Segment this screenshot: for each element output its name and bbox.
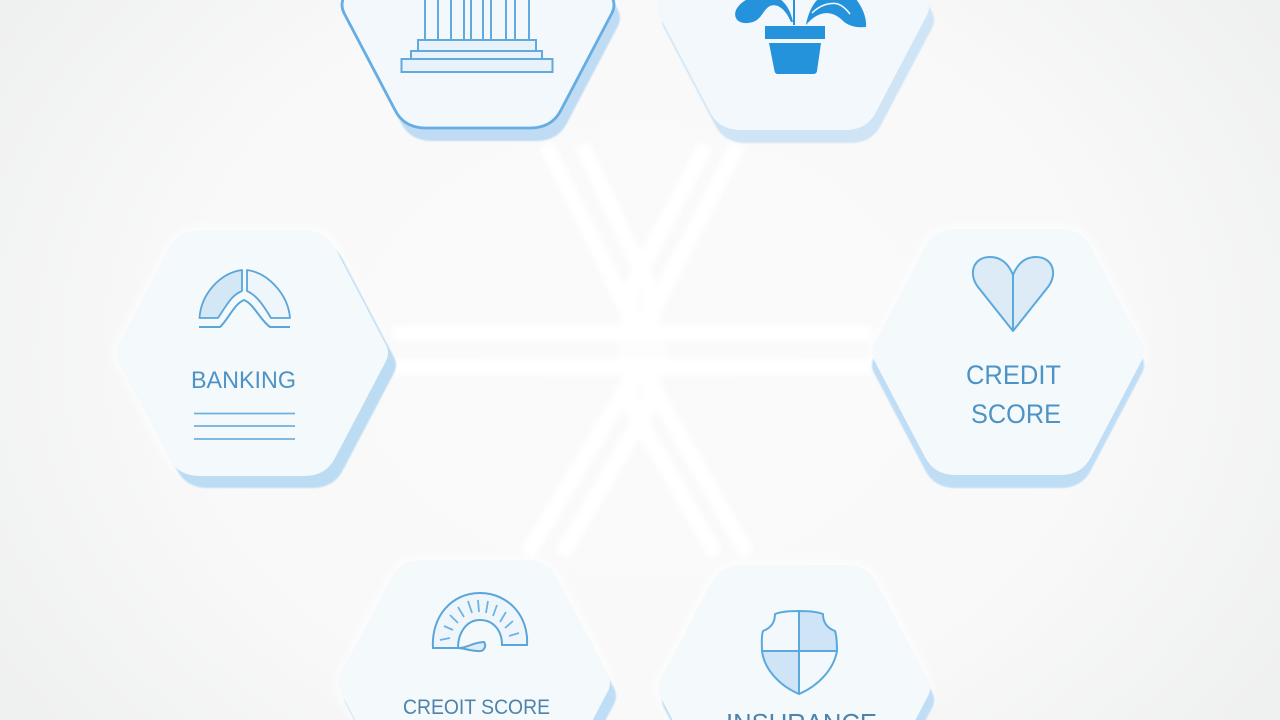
icon: potted plant <box>735 0 866 74</box>
label: credit score <box>966 360 1061 429</box>
panel: top-left hexagon (bank building) <box>342 0 620 141</box>
icon: bank columns <box>402 0 552 72</box>
label: credit score: SCORE <box>971 399 1061 429</box>
text lines <box>194 414 295 439</box>
panel: banking hexagon <box>116 230 396 488</box>
label: creoit score: CREOIT SCORE <box>403 696 550 719</box>
panel: credit score gauge hexagon <box>338 560 616 720</box>
icon: shield <box>762 611 837 694</box>
panel: credit score heart hexagon <box>872 229 1144 488</box>
label: banking: BANKING <box>191 367 296 394</box>
icon: heart <box>973 257 1053 331</box>
icon: gauge <box>433 593 527 651</box>
panel: top-right hexagon (plant) <box>657 0 934 143</box>
connector lines <box>392 145 872 555</box>
panel: insurance hexagon <box>658 565 934 720</box>
icon: arch <box>199 270 290 327</box>
label: credit score: CREDIT <box>966 360 1061 390</box>
